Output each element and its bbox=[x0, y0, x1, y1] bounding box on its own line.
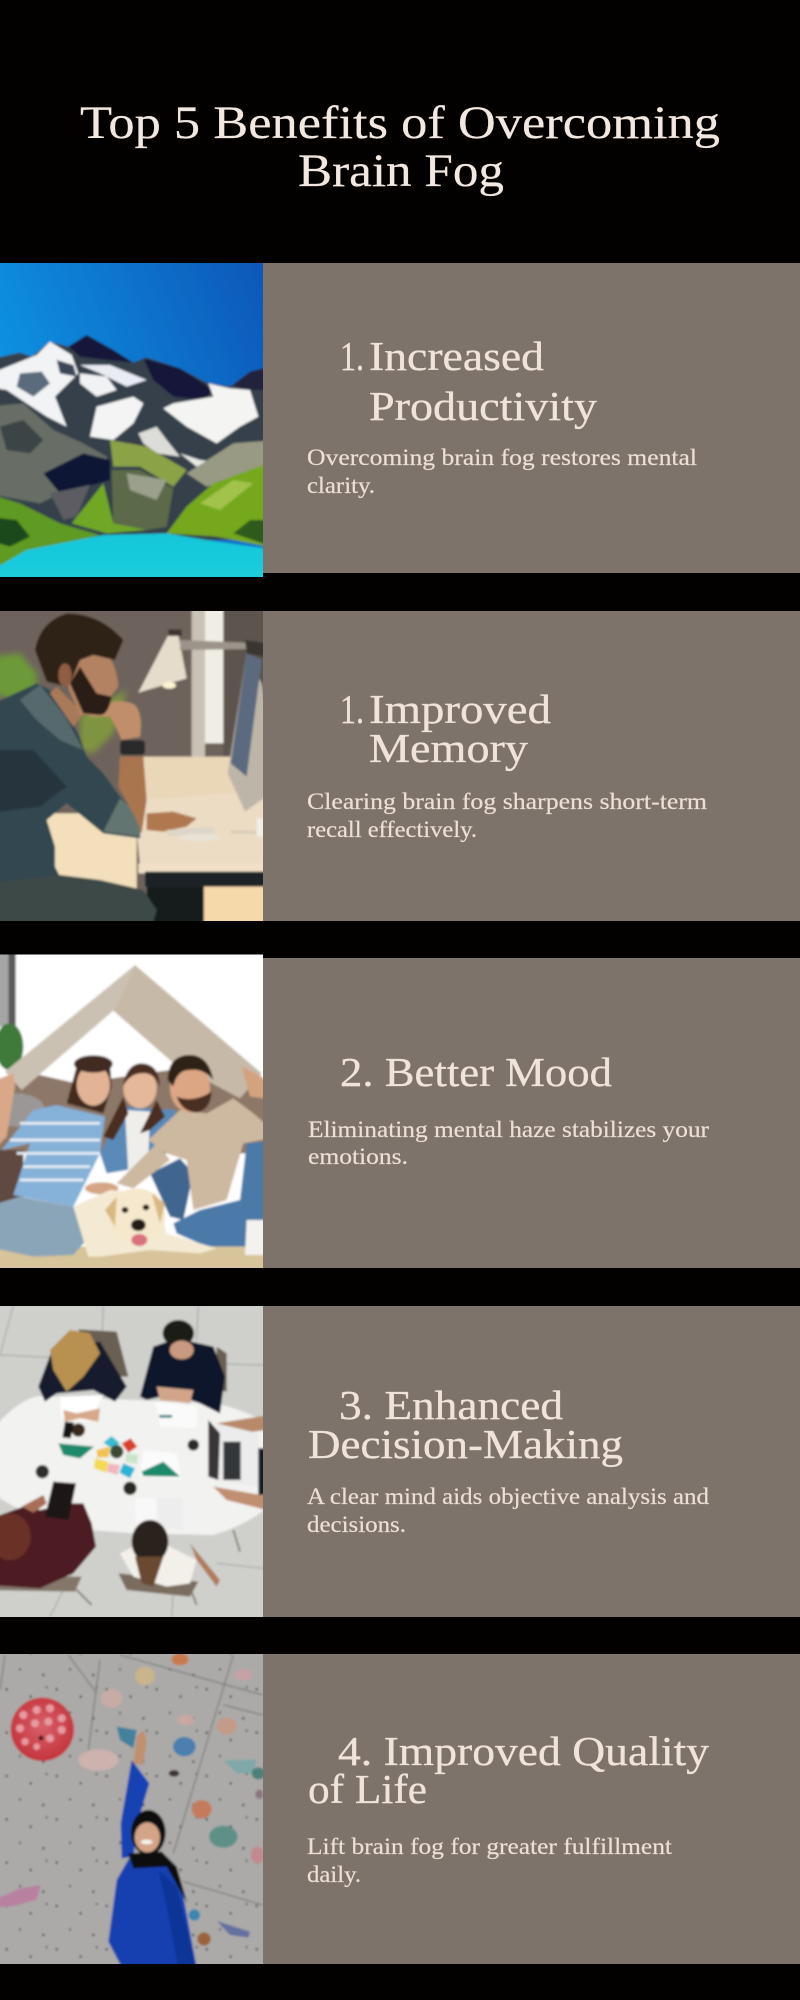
heading: Improved bbox=[369, 686, 551, 732]
heading: 2. Better Mood bbox=[340, 1049, 612, 1095]
description: A clear mind aids objective analysis and bbox=[307, 1484, 710, 1509]
photo: family under cardboard roof bbox=[0, 954, 263, 1268]
description bbox=[307, 445, 697, 498]
heading bbox=[308, 1382, 623, 1467]
description: clarity. bbox=[307, 473, 375, 498]
description: Clearing brain fog sharpens short-term bbox=[307, 789, 707, 814]
description: Lift brain fog for greater fulfillment bbox=[307, 1834, 673, 1859]
description: decisions. bbox=[307, 1512, 406, 1537]
heading bbox=[340, 686, 551, 771]
heading: Productivity bbox=[369, 383, 598, 429]
heading: 3. Enhanced bbox=[339, 1382, 563, 1428]
description: Eliminating mental haze stabilizes your bbox=[308, 1117, 709, 1142]
title: Top 5 Benefits of Overcoming bbox=[80, 97, 720, 149]
panel background bbox=[263, 958, 800, 1268]
panel: enhanced decision-making bbox=[0, 1293, 800, 1633]
heading: Decision-Making bbox=[308, 1421, 623, 1467]
heading: 1. bbox=[340, 333, 364, 379]
description: Overcoming brain fog restores mental bbox=[307, 445, 697, 470]
panel: increased productivity bbox=[0, 250, 800, 590]
panel background bbox=[263, 263, 800, 573]
description bbox=[307, 1834, 673, 1887]
photo: woman on climbing wall bbox=[0, 1654, 263, 1964]
description: daily. bbox=[307, 1862, 361, 1887]
description: recall effectively. bbox=[307, 817, 477, 842]
panel: improved quality of life bbox=[0, 1643, 800, 1977]
panel background bbox=[263, 611, 800, 921]
description bbox=[308, 1117, 709, 1169]
heading bbox=[340, 333, 598, 429]
title: Brain Fog bbox=[298, 145, 504, 197]
photo: man at desk bbox=[0, 611, 263, 921]
panel: improved memory bbox=[0, 600, 800, 933]
heading: Increased bbox=[369, 333, 544, 379]
heading: 4. Improved Quality bbox=[338, 1728, 710, 1774]
panel background bbox=[263, 1654, 800, 1964]
photo: team meeting from above bbox=[0, 1306, 263, 1617]
description bbox=[307, 1484, 710, 1537]
heading: 1. bbox=[340, 686, 364, 732]
panel: better mood bbox=[0, 943, 800, 1283]
title bbox=[80, 97, 720, 197]
description bbox=[307, 789, 707, 842]
photo: mountain lake bbox=[0, 263, 263, 577]
description: emotions. bbox=[308, 1144, 408, 1169]
heading: Memory bbox=[369, 725, 529, 771]
heading: of Life bbox=[308, 1766, 427, 1812]
heading bbox=[308, 1728, 710, 1812]
panel background bbox=[263, 1306, 800, 1617]
